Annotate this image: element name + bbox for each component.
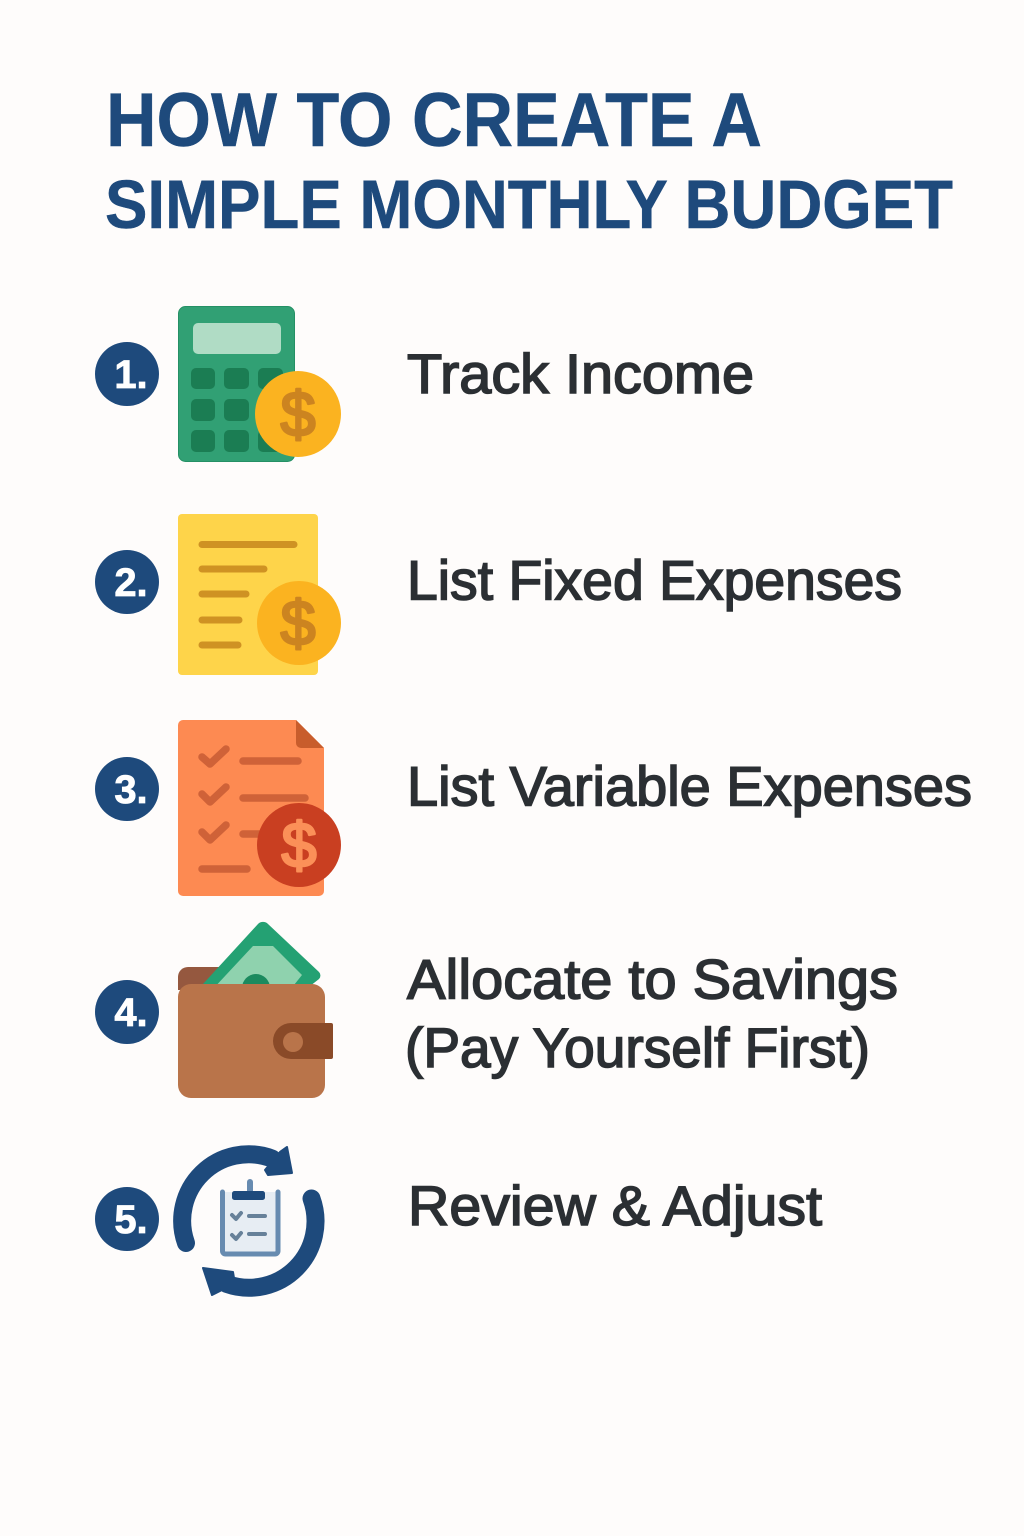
- step 3: list variable expenses: [95, 720, 972, 896]
- badge 2: [95, 550, 159, 614]
- title: [105, 78, 953, 243]
- badge 1: 1.: [114, 353, 148, 397]
- step 1: track income: [95, 306, 754, 462]
- icon: checklist with coin: $: [281, 811, 317, 881]
- step 5: review and adjust: [95, 1147, 822, 1295]
- badge 2: 2.: [114, 561, 148, 605]
- label: list fixed expenses: List Fixed Expenses: [407, 548, 902, 612]
- icon: wallet with cash: [178, 922, 333, 1098]
- badge 3: [95, 757, 159, 821]
- label: review and adjust: Review & Adjust: [408, 1174, 822, 1237]
- badge 4: 4.: [114, 991, 148, 1035]
- title: HOW TO CREATE A: [106, 78, 762, 163]
- badge 1: [95, 342, 159, 406]
- step 4: allocate to savings: [95, 922, 898, 1098]
- icon: checklist with coin: [178, 720, 341, 896]
- label: list variable expenses: List Variable Expenses: [407, 754, 972, 818]
- label: allocate to savings: Allocate to Savings: [407, 948, 898, 1010]
- icon: bill with coin: $: [280, 589, 316, 659]
- step 2: list fixed expenses: [95, 514, 902, 675]
- badge 5: 5.: [114, 1198, 148, 1242]
- icon: bill with coin: [178, 514, 341, 675]
- icon: calculator with coin: [178, 306, 341, 462]
- badge 4: [95, 980, 159, 1044]
- label: track income: Track Income: [407, 342, 754, 405]
- icon: review cycle with clipboard: [182, 1147, 316, 1295]
- icon: calculator with coin: $: [280, 380, 316, 450]
- label: allocate to savings: (Pay Yourself First): [405, 1016, 870, 1079]
- badge 5: [95, 1187, 159, 1251]
- label: allocate to savings: [405, 948, 898, 1079]
- title: SIMPLE MONTHLY BUDGET: [105, 166, 953, 243]
- badge 3: 3.: [114, 768, 148, 812]
